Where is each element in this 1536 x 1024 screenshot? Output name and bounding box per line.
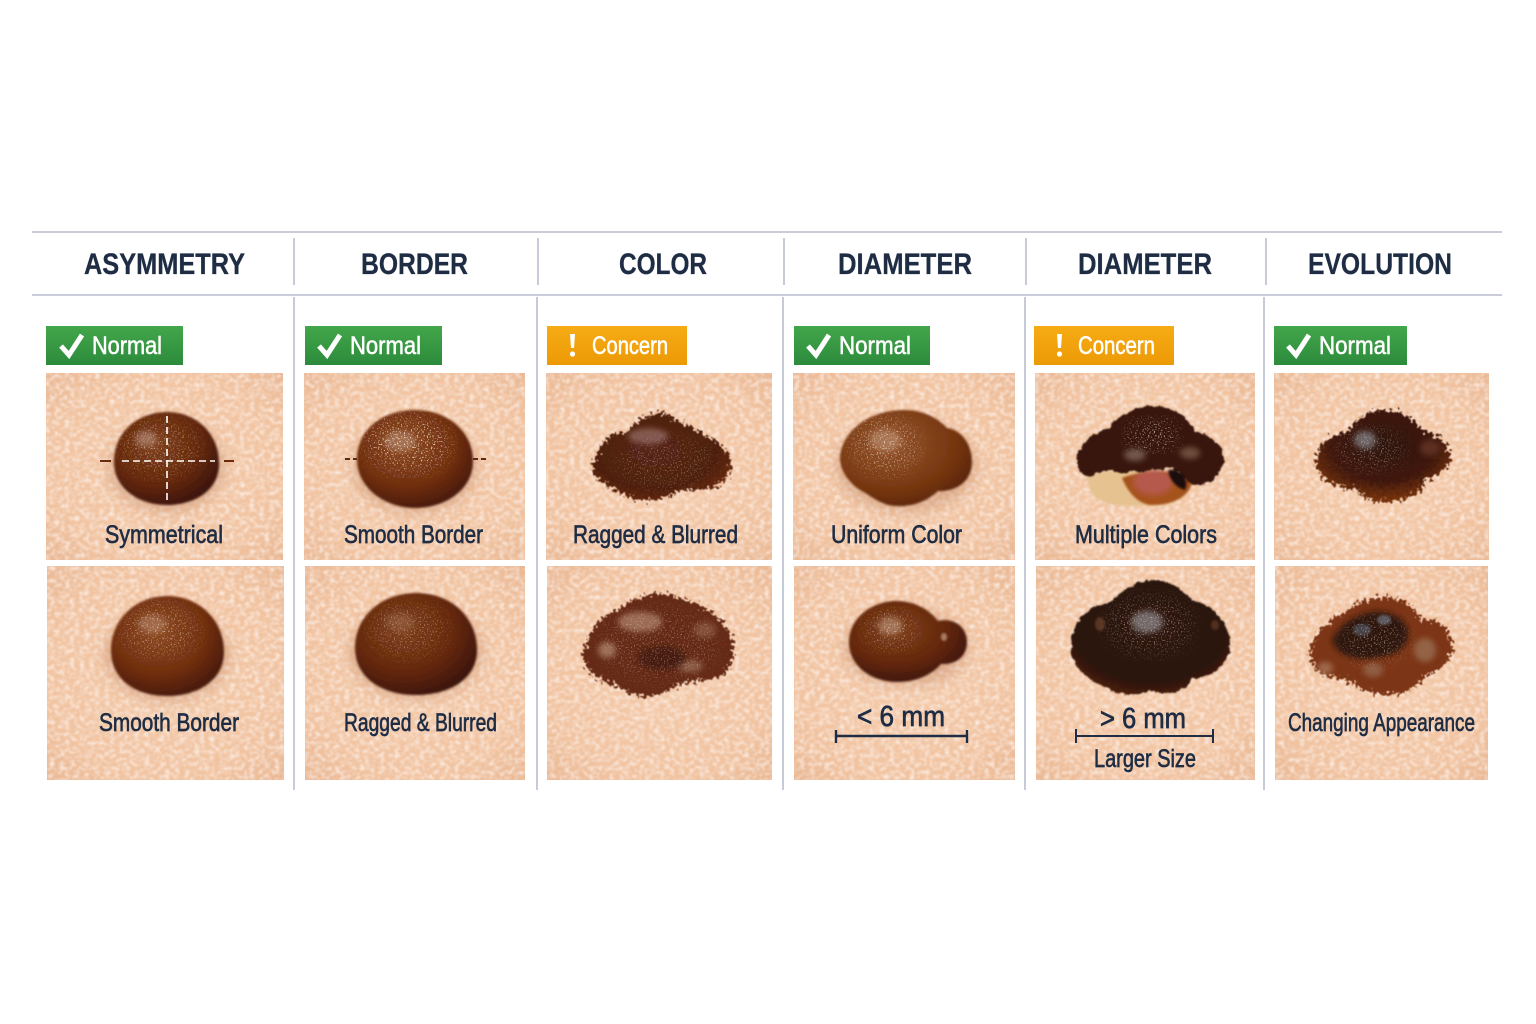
measurement: over 6 mm [1076, 703, 1213, 773]
badge: concern [1034, 326, 1174, 365]
tile: smooth border mole [47, 566, 284, 780]
label: Smooth Border [99, 709, 239, 737]
mole: uniform color [836, 410, 976, 512]
badge: normal [1274, 326, 1407, 365]
border axis dashes [345, 458, 487, 460]
mole: large dark [1071, 580, 1230, 695]
tile: large mole over 6 mm [1036, 566, 1255, 780]
heading: diameter: DIAMETER [838, 248, 972, 281]
badge: normal [794, 326, 930, 365]
mole: evolving early [1316, 410, 1451, 502]
badge: normal: Normal [350, 332, 421, 360]
badge: concern: Concern [592, 332, 668, 360]
heading: diameter: DIAMETER [1078, 248, 1212, 281]
heading: color: COLOR [619, 248, 707, 281]
label: Smooth Border [344, 521, 483, 549]
mole: small lobed [844, 601, 968, 686]
panel: asymmetry column [46, 248, 284, 780]
panel: border column [304, 248, 525, 780]
badge: normal: Normal [839, 332, 911, 360]
tile: second border mole [305, 566, 525, 780]
tile: uniform color mole [793, 373, 1015, 560]
measurement: under 6 mm: < 6 mm [857, 701, 945, 733]
label: Ragged & Blurred [344, 709, 497, 737]
badge: concern [547, 326, 687, 365]
mole: changing appearance [1310, 597, 1453, 694]
tile: changing appearance mole [1275, 566, 1488, 780]
mole: smooth border [353, 410, 477, 513]
tile: smooth border mole [304, 373, 525, 560]
mole: smooth dome [105, 596, 229, 701]
badge: normal [305, 326, 442, 365]
measurement: over 6 mm: > 6 mm [1100, 703, 1186, 735]
badge: normal: Normal [1319, 332, 1391, 360]
badge: concern: Concern [1078, 332, 1155, 360]
tile: evolving mole early [1274, 373, 1489, 560]
heading: asymmetry: ASYMMETRY [84, 248, 245, 281]
label: Ragged & Blurred [573, 521, 738, 549]
mole: ragged [593, 413, 731, 501]
symmetry axes [100, 416, 234, 503]
label: Changing Appearance [1288, 709, 1475, 737]
label: Larger Size [1094, 745, 1196, 773]
tile: ragged mottled mole [547, 566, 772, 780]
panel: evolution column [1274, 248, 1489, 780]
heading: evolution: EVOLUTION [1308, 248, 1452, 281]
tile: ragged mole [546, 373, 772, 560]
panel: color column [546, 248, 772, 780]
tile: multiple colors mole [1035, 373, 1255, 560]
mole: symmetrical [109, 412, 225, 512]
tile: symmetrical mole [46, 373, 283, 560]
panel: diameter concern column [1034, 248, 1255, 780]
mole: ragged mottled [583, 593, 734, 696]
label: Multiple Colors [1075, 521, 1217, 549]
badge: normal: Normal [92, 332, 162, 360]
label: Symmetrical [105, 521, 223, 549]
badge: normal [46, 326, 183, 365]
panel: diameter normal column [793, 248, 1015, 780]
label: Uniform Color [831, 521, 962, 549]
heading: border: BORDER [361, 248, 468, 281]
measurement: under 6 mm [836, 701, 967, 743]
tile: small mole under 6 mm [794, 566, 1015, 780]
mole: multiple colors [1077, 406, 1224, 506]
mole: large dome [350, 593, 482, 699]
